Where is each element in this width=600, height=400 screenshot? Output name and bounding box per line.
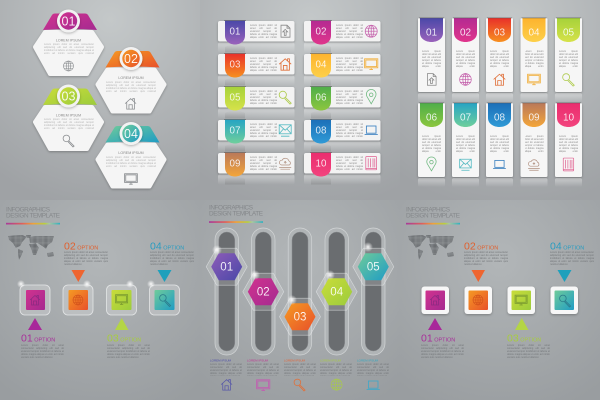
- column 05: 05: [563, 28, 574, 38]
- hexagon 03: 03: [62, 90, 75, 104]
- column 06: [418, 102, 445, 187]
- label 04: 04 OPTION: [150, 240, 184, 252]
- icon: laptop: [367, 381, 380, 389]
- hexagon 01: 01: [62, 14, 75, 28]
- card 04: [304, 53, 380, 86]
- label 02: 02 OPTION: [464, 240, 498, 252]
- column 02: [452, 17, 479, 102]
- card 10: 10: [316, 158, 327, 170]
- column 05: [555, 17, 582, 102]
- title: INFOGRAPHICS: [209, 204, 253, 212]
- column 07: [452, 102, 479, 187]
- hexagon 02: 02: [124, 52, 138, 66]
- column 10: 10: [563, 112, 574, 124]
- square 02: [464, 286, 492, 314]
- card 02: [304, 20, 380, 52]
- arrow 04: [158, 270, 172, 282]
- column 01: [418, 17, 445, 102]
- column 08: 08: [494, 112, 505, 124]
- column 10: [555, 102, 582, 187]
- arrow 04: [558, 270, 572, 282]
- arrow 02: [472, 270, 485, 282]
- card 07: 07: [230, 126, 240, 136]
- slider 05: 05: [367, 262, 380, 274]
- panel: horizontal cards 01-10: [200, 0, 400, 200]
- option headings: LOREM IPSUM: [247, 358, 269, 362]
- arrow 01: [28, 318, 42, 330]
- card 09: [218, 152, 294, 184]
- icon: home: [221, 380, 232, 390]
- column 03: 03: [494, 28, 505, 38]
- column 09: [520, 102, 548, 187]
- title: DESIGN TEMPLATE: [209, 210, 263, 218]
- option text 04: Lorem ipsum dolor sit amet consectetur adipiscing elit sed do eiusmod tempor incididunt ut labore et dolore magna aliqua ut enim ad minim veniam quis nostrud ullamco: [150, 251, 194, 266]
- card 03: [218, 53, 294, 86]
- card 01: [218, 20, 294, 52]
- option headings: LOREM IPSUM: [320, 358, 342, 362]
- icon: globe: [331, 379, 342, 390]
- slider 05: [353, 228, 394, 355]
- card 08: [304, 119, 380, 152]
- title: INFOGRAPHICS: [6, 206, 50, 214]
- slider 03: 03: [294, 312, 306, 324]
- option text 02: Lorem ipsum dolor sit amet consectetur adipiscing elit sed do eiusmod tempor incididunt ut labore et dolore magna aliqua ut enim ad minim veniam quis nostrud ullamco: [464, 251, 508, 266]
- hexagon 04: [98, 122, 164, 186]
- square 02: [63, 280, 93, 315]
- slider 02: 02: [257, 287, 270, 299]
- card 09: 09: [230, 158, 240, 170]
- column 08: [486, 102, 513, 187]
- icon: monitor: [257, 380, 270, 391]
- label 04: 04 OPTION: [550, 240, 584, 252]
- option text 02: Lorem ipsum dolor sit amet consectetur adipiscing elit sed do eiusmod tempor incididunt ut labore et dolore magna aliqua ut enim ad minim veniam quis nostrud ullamco: [64, 251, 108, 266]
- hexagon 02: [98, 47, 164, 112]
- panel: hexagon steps: [0, 0, 200, 200]
- column 06: 06: [426, 112, 437, 124]
- label 01: 01 OPTION: [21, 333, 55, 345]
- label 01: 01 OPTION: [421, 333, 455, 345]
- hexagon 01: LOREM IPSUM: [56, 38, 81, 42]
- column 04: 04: [528, 28, 540, 38]
- column 02: 02: [460, 28, 471, 38]
- panel: slider hexagons: [200, 200, 400, 400]
- card 10: [304, 152, 380, 184]
- option headings: LOREM IPSUM: [210, 358, 232, 362]
- card 06: 06: [316, 92, 327, 104]
- card 07: [218, 119, 294, 152]
- column 09: 09: [528, 112, 540, 124]
- arrow 03: [115, 318, 128, 330]
- card 04: 04: [316, 60, 327, 70]
- hexagon 03: LOREM IPSUM: [56, 114, 81, 118]
- slider 04: 04: [330, 287, 344, 299]
- square 01: [17, 280, 50, 315]
- arrow 02: [72, 270, 85, 282]
- arrow 01: [428, 318, 442, 330]
- card 03: 03: [230, 60, 241, 70]
- world map: [408, 235, 454, 260]
- slider 04: [316, 228, 357, 355]
- panel: white squares options: [400, 200, 600, 400]
- column 01: 01: [426, 28, 437, 38]
- label 02: 02 OPTION: [64, 240, 98, 252]
- square 04: [550, 286, 578, 314]
- title: [406, 206, 460, 224]
- card 05: [218, 86, 294, 118]
- column 03: [486, 17, 513, 102]
- arrow 03: [515, 318, 528, 330]
- square 04: [147, 280, 180, 315]
- panel: vertical cards 01-10: [400, 0, 600, 200]
- slider 01: 01: [220, 262, 233, 274]
- hexagon 01: [35, 10, 102, 74]
- world map: [8, 235, 54, 260]
- hexagon 04: 04: [124, 127, 138, 141]
- option headings: LOREM IPSUM: [357, 358, 379, 362]
- card 01: 01: [230, 26, 240, 38]
- label 03: 03 OPTION: [107, 333, 141, 345]
- card 02: 02: [316, 26, 326, 38]
- slider 02: [243, 228, 284, 355]
- card 06: [304, 86, 380, 118]
- slider 03: [280, 228, 320, 355]
- title: DESIGN TEMPLATE: [406, 212, 460, 219]
- option headings: LOREM IPSUM: [284, 358, 306, 362]
- panel: glass squares options: [0, 200, 200, 400]
- column 07: 07: [460, 112, 471, 124]
- column 04: [520, 17, 548, 102]
- label 03: 03 OPTION: [507, 333, 541, 345]
- icon: search: [294, 379, 305, 391]
- square 03: [508, 286, 535, 314]
- option text 04: Lorem ipsum dolor sit amet consectetur adipiscing elit sed do eiusmod tempor incididunt ut labore et dolore magna aliqua ut enim ad minim veniam quis nostrud ullamco: [550, 251, 594, 266]
- title: [6, 206, 60, 224]
- hexagon 04: LOREM IPSUM: [118, 151, 144, 155]
- square 01: [422, 286, 449, 314]
- option headings: [210, 358, 379, 362]
- square 03: [106, 280, 136, 315]
- title: INFOGRAPHICS: [406, 206, 450, 214]
- card 08: 08: [316, 126, 327, 136]
- card 05: 05: [230, 92, 241, 104]
- hexagon 03: [35, 84, 102, 149]
- slider 01: [206, 228, 247, 355]
- title: [209, 204, 263, 223]
- hexagon 02: LOREM IPSUM: [118, 76, 144, 80]
- title: DESIGN TEMPLATE: [6, 212, 60, 219]
